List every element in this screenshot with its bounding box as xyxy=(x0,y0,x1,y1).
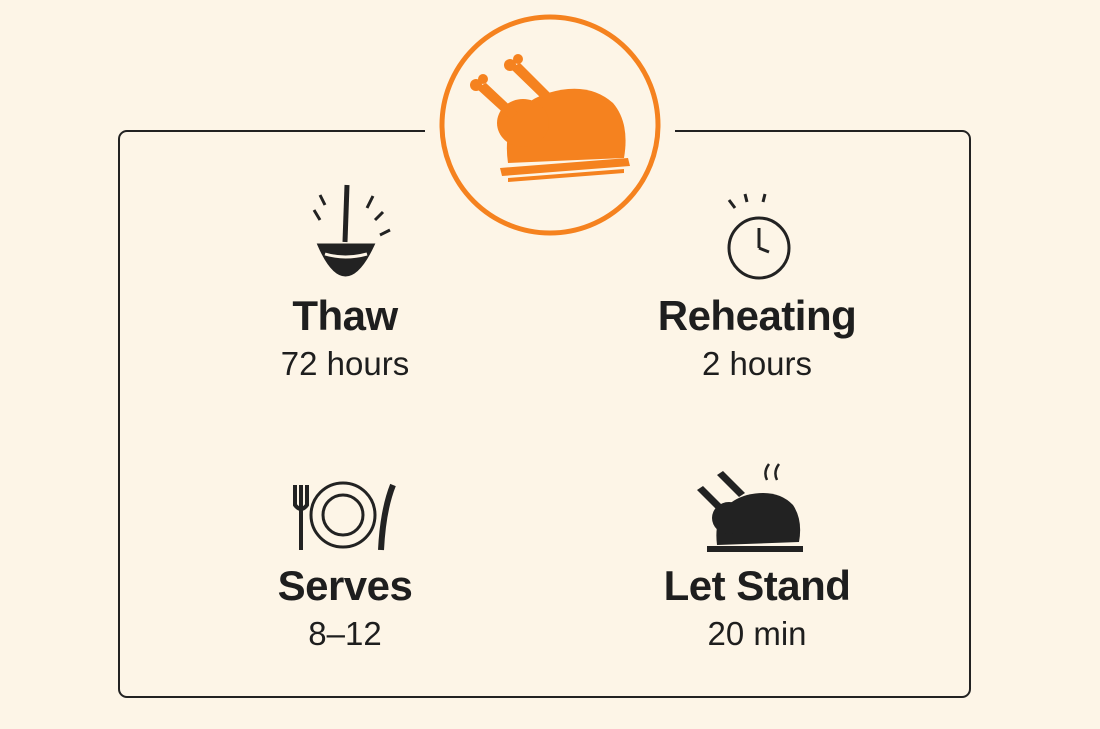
icon: turkey badge xyxy=(440,14,660,236)
icon: turkey xyxy=(697,463,803,552)
panel: info box xyxy=(118,130,971,698)
block: thaw xyxy=(281,184,409,382)
block: serves: 8–12 xyxy=(308,615,382,652)
block: reheating: 2 hours xyxy=(702,345,812,382)
block: thaw: 72 hours xyxy=(281,345,409,382)
block: serves xyxy=(278,482,412,652)
block: reheating xyxy=(658,194,856,382)
block: thaw: Thaw xyxy=(292,292,398,339)
block: reheating: Reheating xyxy=(658,292,856,339)
block: let stand xyxy=(664,463,850,652)
block: serves: Serves xyxy=(278,562,412,609)
icon: clock xyxy=(728,194,790,280)
border gap behind circle xyxy=(425,126,675,136)
block: let stand: 20 min xyxy=(707,615,807,652)
block: let stand: Let Stand xyxy=(664,562,850,609)
icon: plate and cutlery xyxy=(293,482,396,550)
icon: bowl xyxy=(312,184,391,276)
